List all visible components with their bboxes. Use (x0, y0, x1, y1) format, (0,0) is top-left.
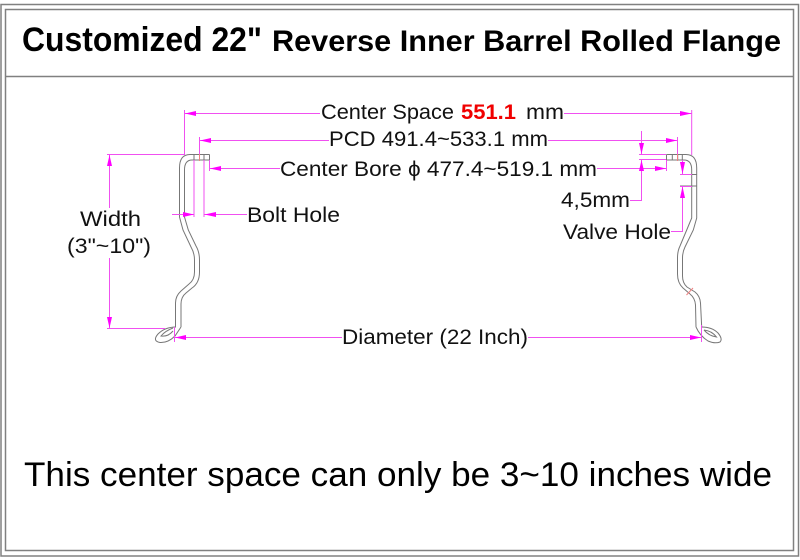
wheel barrel cross-section: right profile (666, 154, 721, 343)
dimension: center space (184, 110, 692, 155)
label: diameter: Diameter (22 Inch) (342, 325, 528, 349)
label: width (67, 207, 151, 258)
label: center bore: Center Bore ϕ 477.4~519.1 mm (280, 157, 597, 181)
dimension: valve hole (671, 160, 692, 232)
title: Reverse Inner Barrel Rolled Flange (272, 25, 781, 58)
label: center space (321, 100, 564, 124)
dimension: PCD (200, 137, 678, 154)
red centre marks (200, 154, 693, 295)
label: center space: 551.1 (461, 100, 516, 124)
title: Customized 22" (22, 21, 262, 59)
title (22, 21, 781, 59)
label: center space: mm (526, 100, 564, 124)
label: valve hole: Valve Hole (563, 220, 671, 244)
label: width: Width (80, 207, 141, 231)
dimension: diameter (174, 325, 702, 342)
label: bolt hole: Bolt Hole (247, 203, 340, 227)
label: width: (3"~10") (67, 234, 151, 258)
label: PCD: PCD 491.4~533.1 mm (329, 127, 548, 151)
wheel barrel cross-section: left profile (155, 154, 210, 343)
dimension: 4,5mm (630, 131, 666, 200)
label: center space: Center Space (321, 100, 454, 124)
dimension: center bore (210, 160, 666, 171)
dimension: bolt hole (172, 160, 247, 217)
dimension: width (107, 154, 185, 328)
footer note: This center space can only be 3~10 inches wide (24, 456, 772, 494)
label: 4,5mm: 4,5mm (561, 188, 630, 212)
